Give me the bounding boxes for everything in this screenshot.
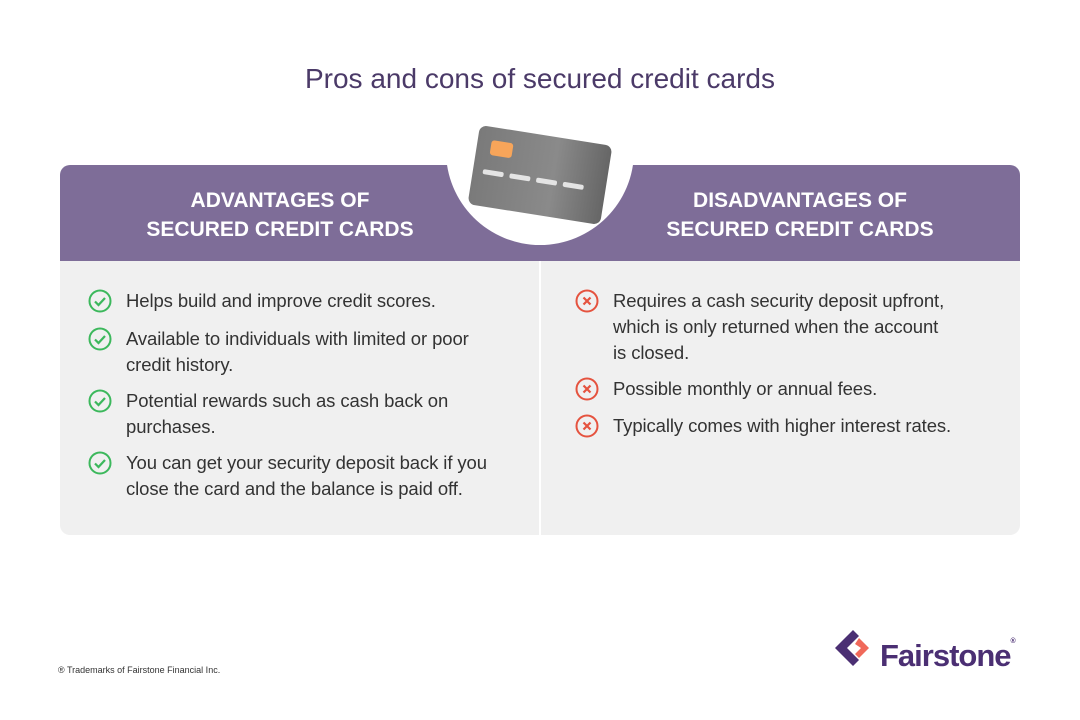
list: advantages [88, 290, 487, 499]
item [576, 290, 944, 363]
header band [60, 165, 1020, 261]
item: is closed. [613, 342, 689, 363]
list: disadvantages [576, 290, 951, 438]
heading: disadvantages [666, 189, 934, 241]
item: purchases. [126, 416, 216, 437]
item: credit history. [126, 354, 233, 375]
item: close the card and the balance is paid off. [126, 478, 463, 499]
icon: credit card with circle cutout [447, 126, 633, 245]
item: You can get your security deposit back if you [126, 452, 487, 473]
heading: advantages: SECURED CREDIT CARDS [146, 218, 414, 241]
item [88, 452, 487, 499]
item [88, 328, 469, 375]
body panel [60, 261, 1020, 535]
item: Helps build and improve credit scores. [126, 290, 436, 311]
item: Available to individuals with limited or poor [126, 328, 469, 349]
item: Requires a cash security deposit upfront, [613, 290, 944, 311]
item: Possible monthly or annual fees. [613, 378, 877, 399]
item [88, 390, 448, 437]
item: which is only returned when the account [613, 316, 938, 337]
heading: advantages [146, 189, 414, 241]
heading: disadvantages: DISADVANTAGES OF [693, 189, 907, 212]
item: Potential rewards such as cash back on [126, 390, 448, 411]
logo [835, 630, 1016, 673]
item: Typically comes with higher interest rates. [613, 415, 951, 436]
title: Pros and cons of secured credit cards [305, 63, 775, 94]
heading: advantages: ADVANTAGES OF [191, 189, 369, 212]
footnote: ® Trademarks of Fairstone Financial Inc. [58, 665, 220, 675]
logo: Fairstone® [880, 638, 1016, 673]
heading: disadvantages: SECURED CREDIT CARDS [666, 218, 934, 241]
